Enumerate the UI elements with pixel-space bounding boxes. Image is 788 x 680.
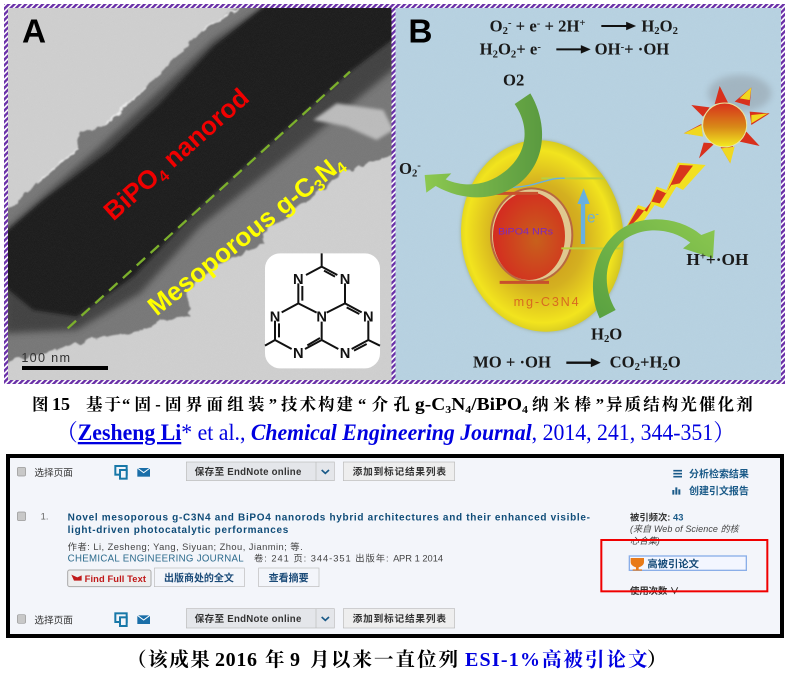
figure caption: 技术构建 [281, 394, 355, 414]
record body: Novel mesoporous g-C3N4 and BiPO4 nanorods hybrid archit [68, 512, 399, 523]
panel A: TEM micrograph [5, 5, 400, 380]
bottom note: ） [647, 649, 667, 671]
figure caption: 图 [32, 395, 48, 414]
species labels: O [668, 352, 681, 371]
scale bar: 100 nm [21, 351, 70, 365]
inset: g-C3N4 structure: N [340, 272, 350, 288]
inset: g-C3N4 structure: N [316, 309, 327, 325]
label: Mesoporous g-C3N4: N [309, 153, 342, 188]
label: BiPO4 nanorod: BiPO [97, 162, 165, 226]
equations top: - [621, 42, 625, 53]
sun [684, 75, 771, 163]
record body: Find Full Text [85, 574, 146, 584]
green dashed interface line [68, 72, 350, 328]
equations top: - [537, 19, 541, 30]
citation count: 心合集) [630, 536, 660, 546]
inset: g-C3N4 structure: N [340, 346, 350, 362]
bottom note: ESI-1% [465, 649, 540, 671]
yellow mg-C3N4 disk [448, 129, 637, 343]
citation count [630, 511, 741, 596]
inset: g-C3N4 structure: N [363, 309, 374, 325]
lightning bolt [622, 163, 706, 234]
figure caption: g-C [415, 394, 443, 414]
micrograph image area [5, 5, 400, 380]
record body: 卷: 241 页: 344-351 出版年: A [254, 552, 400, 563]
equations top: O [660, 16, 673, 35]
inset: g-C3N4 structure: N [270, 309, 280, 325]
figure caption: 基于 [86, 395, 123, 414]
label mg-C3N4: mg-C3N4 [514, 295, 579, 309]
inset: g-C3N4 structure: N [293, 272, 304, 288]
bottom toolbar: 保存至 EndNote online [195, 613, 302, 625]
top toolbar: 添加到标记结果列表 [353, 466, 446, 478]
highly cited badge: 高被引论文 [647, 557, 700, 570]
bottom note: 2016 [215, 649, 257, 671]
equations top: O [498, 40, 511, 59]
bottom note: （该成果 [127, 649, 211, 671]
label: BiPO4 nanorod: nanorod [152, 82, 255, 178]
analysis links: 分析检索结果 [689, 467, 749, 480]
right part of record [399, 467, 767, 596]
species labels: CO [610, 352, 635, 371]
green arrow H2O to H+ [593, 219, 715, 318]
figure caption: N [451, 394, 465, 414]
citation line: （Zesheng Li* et al., Chemical Engineering Journal, 2014, 241, 344-351） [56, 420, 735, 445]
species labels: + [700, 252, 706, 263]
panel B: photocatalysis mechanism [395, 8, 782, 380]
citation count: (来自 Web of Science 的核 [630, 524, 741, 534]
figure caption [32, 394, 755, 416]
equations top: O [490, 16, 503, 35]
figure caption: “介孔 [358, 395, 410, 414]
record body: 出版商处的全文 [164, 571, 234, 584]
equations top: + e [512, 16, 537, 35]
equations top: 2 [511, 49, 516, 60]
species labels: 2 [662, 362, 668, 373]
species labels: - [417, 161, 421, 172]
band levels [488, 178, 623, 282]
red BiPO4 core: BiPO4 NRs [498, 227, 553, 237]
green arrow O2 to O2- [425, 93, 542, 197]
electron arrow: - [596, 209, 599, 220]
bottom note: 9 [290, 649, 300, 671]
species labels: O [399, 159, 412, 178]
figure caption: 3 [445, 404, 452, 416]
figure caption: 4 [465, 404, 472, 416]
bottom note: 年 [265, 648, 285, 671]
record body: 查看摘要 [269, 571, 309, 584]
species labels: H [591, 324, 604, 343]
figure caption: /BiPO [470, 394, 522, 414]
species labels: +H [640, 352, 662, 371]
equations top: 2 [654, 26, 660, 37]
bottom note: 月 [310, 649, 330, 671]
hatched frame [6, 6, 783, 382]
species labels: MO + ·OH [473, 352, 551, 371]
equations top: + [579, 18, 585, 29]
figure caption: 纳米棒” [532, 394, 604, 414]
label B: B [408, 14, 432, 51]
species labels: O [609, 324, 622, 343]
equations top: - [537, 42, 541, 53]
species labels: 2 [604, 334, 609, 345]
label A: A [22, 13, 46, 50]
figure caption: 4 [522, 404, 529, 416]
species labels: 2 [412, 169, 417, 180]
left part of record [17, 462, 455, 628]
title continuation: ectures and their enhanced visible- [399, 512, 590, 523]
bottom toolbar: 添加到标记结果列表 [353, 613, 446, 625]
equations top [480, 16, 678, 60]
equations top: 2 [493, 49, 498, 60]
electron arrow [513, 178, 599, 244]
red BiPO4 core [491, 188, 572, 282]
bottom toolbar [17, 609, 455, 628]
label: BiPO4 nanorod: 4 [155, 167, 173, 186]
top toolbar: 选择页面 [34, 467, 73, 479]
noise texture B [395, 8, 782, 380]
highly cited badge [629, 556, 746, 571]
label: Mesoporous g-C3N4: Mesoporous g-C [142, 170, 321, 321]
equations top: + ·OH [624, 40, 669, 59]
figure caption: 异质结构光催化剂 [606, 394, 755, 414]
inset: g-C3N4 structure: N [293, 346, 304, 362]
bottom note: 高被引论文 [542, 648, 650, 671]
equations top: H [480, 40, 493, 59]
bottom toolbar: 选择页面 [34, 614, 73, 626]
equations top: + e [516, 40, 537, 59]
red highlight box [601, 540, 767, 591]
record body: 1. [41, 511, 48, 521]
equations top: 2 [673, 26, 678, 37]
label: Mesoporous g-C3N4: 3 [311, 176, 329, 195]
citation count: 被引频次: 43 [630, 511, 683, 522]
citation count: 使用次数 ∨ [630, 585, 679, 596]
record body [17, 511, 400, 587]
bottom note [127, 648, 667, 671]
analysis links [673, 467, 749, 498]
species labels [399, 70, 749, 373]
equations top: H [641, 16, 654, 35]
bottom note: 以来一直位列 [331, 649, 460, 671]
scale bar [21, 351, 108, 370]
equations top: + 2H [540, 16, 579, 35]
species labels: O2 [503, 70, 524, 89]
inset: g-C3N4 structure [265, 253, 380, 368]
top toolbar: 保存至 EndNote online [195, 466, 302, 478]
equations top: - [508, 18, 512, 29]
species labels: H [686, 250, 700, 269]
electron arrow: e [587, 210, 596, 227]
figure caption: “固-固界面组装” [122, 394, 277, 414]
date: PR 1 2014 [399, 553, 443, 563]
equations top: OH [595, 40, 621, 59]
analysis links: 创建引文报告 [689, 485, 749, 498]
figure caption: 15 [52, 394, 70, 414]
equation arrows [556, 22, 636, 367]
label: Mesoporous g-C3N4: 4 [333, 159, 351, 178]
equations top: 2 [503, 26, 508, 37]
species labels: 2 [635, 362, 640, 373]
record body: light-driven photocatalytic performances [68, 525, 289, 536]
record body: CHEMICAL ENGINEERING JOURNAL [68, 553, 244, 564]
panel: Web of Science screenshot [8, 456, 782, 636]
species labels: +·OH [706, 250, 749, 269]
record body: 作者: Li, Zesheng; Yang, Siyuan; Zhou, Jianmin; 等. [68, 541, 303, 552]
top toolbar [17, 462, 455, 481]
